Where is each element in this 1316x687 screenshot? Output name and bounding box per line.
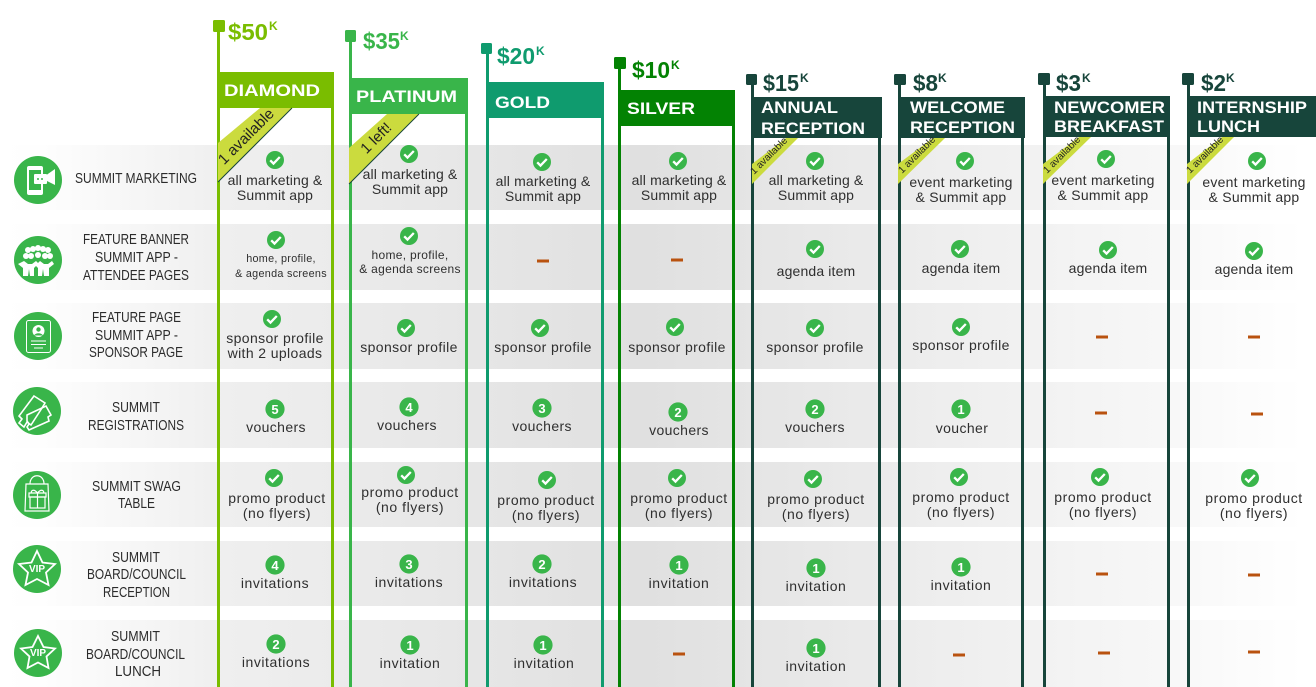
ribbon: internship 1 available [1184,134,1234,184]
column: welcome reception [894,70,1025,687]
cell: welcome voucher: voucher [936,420,988,436]
cell: gold swag [497,471,595,523]
cell: gold page [494,319,592,355]
cell: internship marketing: event marketing [1202,174,1306,190]
label: swag table: TABLE [118,495,155,512]
column: diamond: K [269,19,278,33]
icon: profile card [14,312,62,360]
icon: gift bag [13,471,61,519]
cell: platinum swag: (no flyers) [376,499,444,515]
column: annual reception: RECEPTION [761,119,865,138]
label: feature page: SUMMIT APP - [95,327,178,344]
column: gold [481,43,604,687]
cell: silver vouchers [649,402,709,438]
cell: annual page [766,319,864,355]
cell: silver marketing: all marketing & [632,172,727,188]
cell: welcome reception: invitation [931,577,991,593]
cell: diamond reception [241,555,309,591]
cell: newcomer marketing [1051,150,1155,203]
row band: feature banner [0,224,1316,290]
icon: crowd of people [14,236,62,284]
cell: silver marketing: Summit app [641,187,717,203]
cell: platinum lunch: invitation [380,655,440,671]
cell: internship vouchers dash [1251,412,1263,416]
column: annual reception: ANNUAL [761,98,838,117]
cell: gold lunch: invitation [514,655,574,671]
cell: gold swag: promo product [497,492,595,508]
cell: internship banner [1215,242,1293,277]
icon: tickets [13,387,61,435]
cell: silver swag: (no flyers) [645,505,713,521]
icon: VIP star lunch: VIP [30,648,46,659]
cell: gold swag: (no flyers) [512,507,580,523]
column: internship lunch: INTERNSHIP [1197,98,1307,117]
icon: phone with megaphone [14,156,62,204]
label: swag table: SUMMIT SWAG [92,478,181,495]
cell: platinum page [360,319,458,355]
ribbon: 1 left: 1 left! [357,119,395,157]
label: feature banner: FEATURE BANNER [83,231,189,248]
cell: diamond lunch [242,634,310,670]
cell: diamond vouchers: 5 [271,402,279,417]
cell: annual marketing: Summit app [778,187,854,203]
label: feature banner [83,231,189,284]
cell: welcome page [912,318,1010,353]
cell: annual swag: (no flyers) [782,506,850,522]
ribbon: newcomer 1 available [1041,134,1091,184]
cell: platinum vouchers [377,397,437,433]
column: diamond [213,19,334,687]
cell: platinum marketing: all marketing & [363,166,458,182]
cell: newcomer swag: (no flyers) [1069,504,1137,520]
cell: diamond vouchers: vouchers [246,419,306,435]
column: silver: $10 [632,57,670,83]
column: welcome reception: WELCOME [910,98,1005,117]
column: welcome reception: K [938,71,947,85]
column: gold: K [536,44,545,58]
cell: welcome swag: (no flyers) [927,504,995,520]
cell: diamond marketing [228,151,323,203]
label: swag table [92,478,181,512]
column: newcomer breakfast: NEWCOMER [1054,98,1165,117]
cell: welcome reception: 1 [957,560,965,575]
ribbon: welcome 1 available: 1 available [896,134,938,176]
ribbon: annual 1 available: 1 available [748,135,790,177]
cell: welcome lunch dash [953,654,965,656]
cell: annual swag: promo product [767,491,865,507]
cell: gold lunch [514,635,574,671]
cell: silver lunch dash [673,652,685,656]
cell: welcome voucher: 1 [957,402,965,417]
column: silver: SILVER [627,99,695,118]
label: summit registrations: SUMMIT [112,399,160,416]
column: platinum [345,28,468,687]
cell: newcomer swag [1054,468,1152,520]
cell: gold page: sponsor profile [494,339,592,355]
cell: silver reception [649,555,709,591]
cell: welcome marketing: & Summit app [916,189,1006,205]
column: annual reception [746,70,882,687]
column: internship lunch: LUNCH [1197,117,1260,136]
row band: feature page [0,303,1316,369]
cell: internship reception dash [1248,574,1260,576]
cell: newcomer marketing: & Summit app [1058,187,1148,203]
label: board reception [87,549,186,601]
cell: welcome marketing [909,152,1013,205]
cell: welcome voucher [936,399,988,436]
cell: internship page dash [1248,336,1260,338]
cell: gold vouchers [512,398,572,434]
cell: gold reception: invitations [509,574,577,590]
cell: diamond reception: invitations [241,575,309,591]
column: platinum: $35 [363,28,400,54]
cell: annual page: sponsor profile [766,339,864,355]
cell: welcome marketing: event marketing [909,174,1013,190]
column: internship lunch [1182,70,1316,687]
label: feature page [89,309,183,361]
row band: board reception [0,541,1316,606]
cell: annual lunch: invitation [786,658,846,674]
cell: gold reception: 2 [538,557,546,572]
cell: welcome swag: promo product [912,489,1010,505]
cell: silver marketing [632,152,727,203]
column: gold: GOLD [495,93,550,112]
cell: platinum vouchers: 4 [405,400,413,415]
cell: diamond marketing: Summit app [237,187,313,203]
column: newcomer breakfast: K [1082,71,1091,85]
cell: annual vouchers [785,399,845,435]
icon: VIP star reception [13,545,61,593]
label: summit registrations [88,399,184,434]
label: board lunch [86,628,185,680]
cell: gold reception [509,554,577,590]
cell: annual reception: invitation [786,578,846,594]
cell: internship marketing: & Summit app [1209,189,1299,205]
column: annual reception: $15 [763,70,799,96]
cell: platinum marketing: Summit app [372,181,448,197]
cell: gold marketing: Summit app [505,188,581,204]
label: feature banner: ATTENDEE PAGES [83,267,189,284]
cell: newcomer lunch dash [1098,652,1110,654]
cell: diamond banner [235,231,327,280]
cell: platinum banner: home, profile, [372,248,448,262]
cell: diamond page: sponsor profile [226,330,324,346]
cell: internship marketing [1202,152,1306,205]
icon: VIP star reception: VIP [29,564,45,575]
cell: internship lunch dash [1248,650,1260,654]
row band: board lunch [0,620,1316,687]
cell: silver page: sponsor profile [628,339,726,355]
column: platinum: K [400,29,409,43]
cell: platinum page: sponsor profile [360,339,458,355]
column: platinum: PLATINUM [356,87,457,106]
cell: platinum lunch [380,635,440,671]
cell: newcomer page dash [1096,336,1108,338]
cell: silver vouchers: vouchers [649,422,709,438]
cell: newcomer vouchers dash [1095,412,1107,414]
icon: VIP star lunch [14,629,62,677]
label: board lunch: SUMMIT [111,628,160,645]
ribbon: internship 1 available: 1 available [1184,134,1226,176]
label: summit marketing: SUMMIT MARKETING [75,170,197,187]
cell: newcomer reception dash [1096,572,1108,576]
cell: silver vouchers: 2 [674,405,682,420]
cell: platinum swag: promo product [361,484,459,500]
cell: diamond lunch: 2 [272,637,280,652]
label: feature page: FEATURE PAGE [92,309,181,326]
cell: newcomer banner: agenda item [1069,260,1147,276]
cell: annual vouchers: vouchers [785,419,845,435]
cell: diamond swag: (no flyers) [243,505,311,521]
cell: gold vouchers: vouchers [512,418,572,434]
cell: platinum vouchers: vouchers [377,417,437,433]
cell: platinum reception [375,554,443,590]
cell: annual banner: agenda item [777,263,855,279]
cell: internship swag: promo product [1205,490,1303,506]
cell: platinum banner: & agenda screens [359,262,461,276]
cell: diamond lunch: invitations [242,654,310,670]
cell: platinum swag [361,466,459,515]
cell: newcomer swag: promo product [1054,489,1152,505]
cell: diamond vouchers [246,399,306,435]
column: internship lunch: $2 [1201,70,1226,96]
ribbon: 1 left [349,114,419,184]
cell: silver reception: invitation [649,575,709,591]
label: summit registrations: REGISTRATIONS [88,417,184,434]
cell: internship swag [1205,469,1303,521]
label: board lunch: LUNCH [115,663,161,680]
cell: gold banner dash [537,260,549,262]
cell: diamond page: with 2 uploads [227,345,322,361]
label: feature page: SPONSOR PAGE [89,344,183,361]
cell: diamond banner: & agenda screens [235,268,327,280]
column: silver [614,57,735,687]
cell: platinum banner [359,227,461,276]
cell: welcome banner: agenda item [922,260,1000,276]
cell: internship swag: (no flyers) [1220,505,1288,521]
cell: silver page [628,318,726,355]
cell: annual lunch [786,638,846,674]
label: feature banner: SUMMIT APP - [95,249,178,266]
cell: silver swag [630,469,728,521]
cell: diamond swag [228,469,326,521]
column: annual reception: K [800,71,809,85]
cell: welcome reception [931,557,991,593]
ribbon: 1 available [215,105,292,182]
cell: annual vouchers: 2 [811,402,819,417]
cell: annual marketing [769,152,864,203]
row band: summit marketing [0,145,1316,210]
cell: silver reception: 1 [675,558,683,573]
row band: summit registrations [0,382,1316,448]
cell: newcomer banner [1069,241,1147,276]
cell: annual reception: 1 [812,561,820,576]
column: newcomer breakfast [1038,70,1170,687]
cell: annual reception [786,558,846,594]
cell: gold marketing [496,153,591,204]
cell: welcome swag [912,468,1010,520]
cell: gold vouchers: 3 [538,401,546,416]
cell: welcome page: sponsor profile [912,337,1010,353]
cell: diamond swag: promo product [228,490,326,506]
cell: diamond reception: 4 [271,558,279,573]
label: board reception: RECEPTION [103,584,170,601]
cell: annual swag [767,470,865,522]
cell: platinum reception: 3 [405,557,413,572]
column: welcome reception: RECEPTION [910,118,1015,137]
cell: gold lunch: 1 [539,638,547,653]
cell: silver swag: promo product [630,490,728,506]
label: board lunch: BOARD/COUNCIL [86,646,185,663]
column: welcome reception: $8 [913,70,938,96]
cell: diamond banner: home, profile, [246,253,316,265]
cell: newcomer marketing: event marketing [1051,172,1155,188]
column: newcomer breakfast: BREAKFAST [1054,117,1165,136]
cell: internship banner: agenda item [1215,261,1293,277]
column: internship lunch: K [1226,71,1235,85]
ribbon: newcomer 1 available: 1 available [1041,134,1083,176]
cell: annual banner [777,240,855,279]
cell: platinum reception: invitations [375,574,443,590]
cell: diamond page [226,310,324,361]
column: diamond: DIAMOND [224,81,320,100]
cell: platinum lunch: 1 [406,638,414,653]
row band: swag table [0,462,1316,527]
cell: platinum marketing [363,145,458,197]
label: board reception: SUMMIT [112,549,160,566]
column: diamond: $50 [228,19,268,45]
column: silver: K [671,58,680,72]
ribbon: 1 available: 1 available [215,105,278,168]
cell: welcome banner [922,240,1000,276]
cell: diamond marketing: all marketing & [228,172,323,188]
label: board reception: BOARD/COUNCIL [87,566,186,583]
cell: annual marketing: all marketing & [769,172,864,188]
cell: silver banner dash [671,258,683,262]
column: gold: $20 [497,43,535,69]
column: newcomer breakfast: $3 [1056,70,1081,96]
cell: annual lunch: 1 [812,641,820,656]
cell: gold marketing: all marketing & [496,173,591,189]
